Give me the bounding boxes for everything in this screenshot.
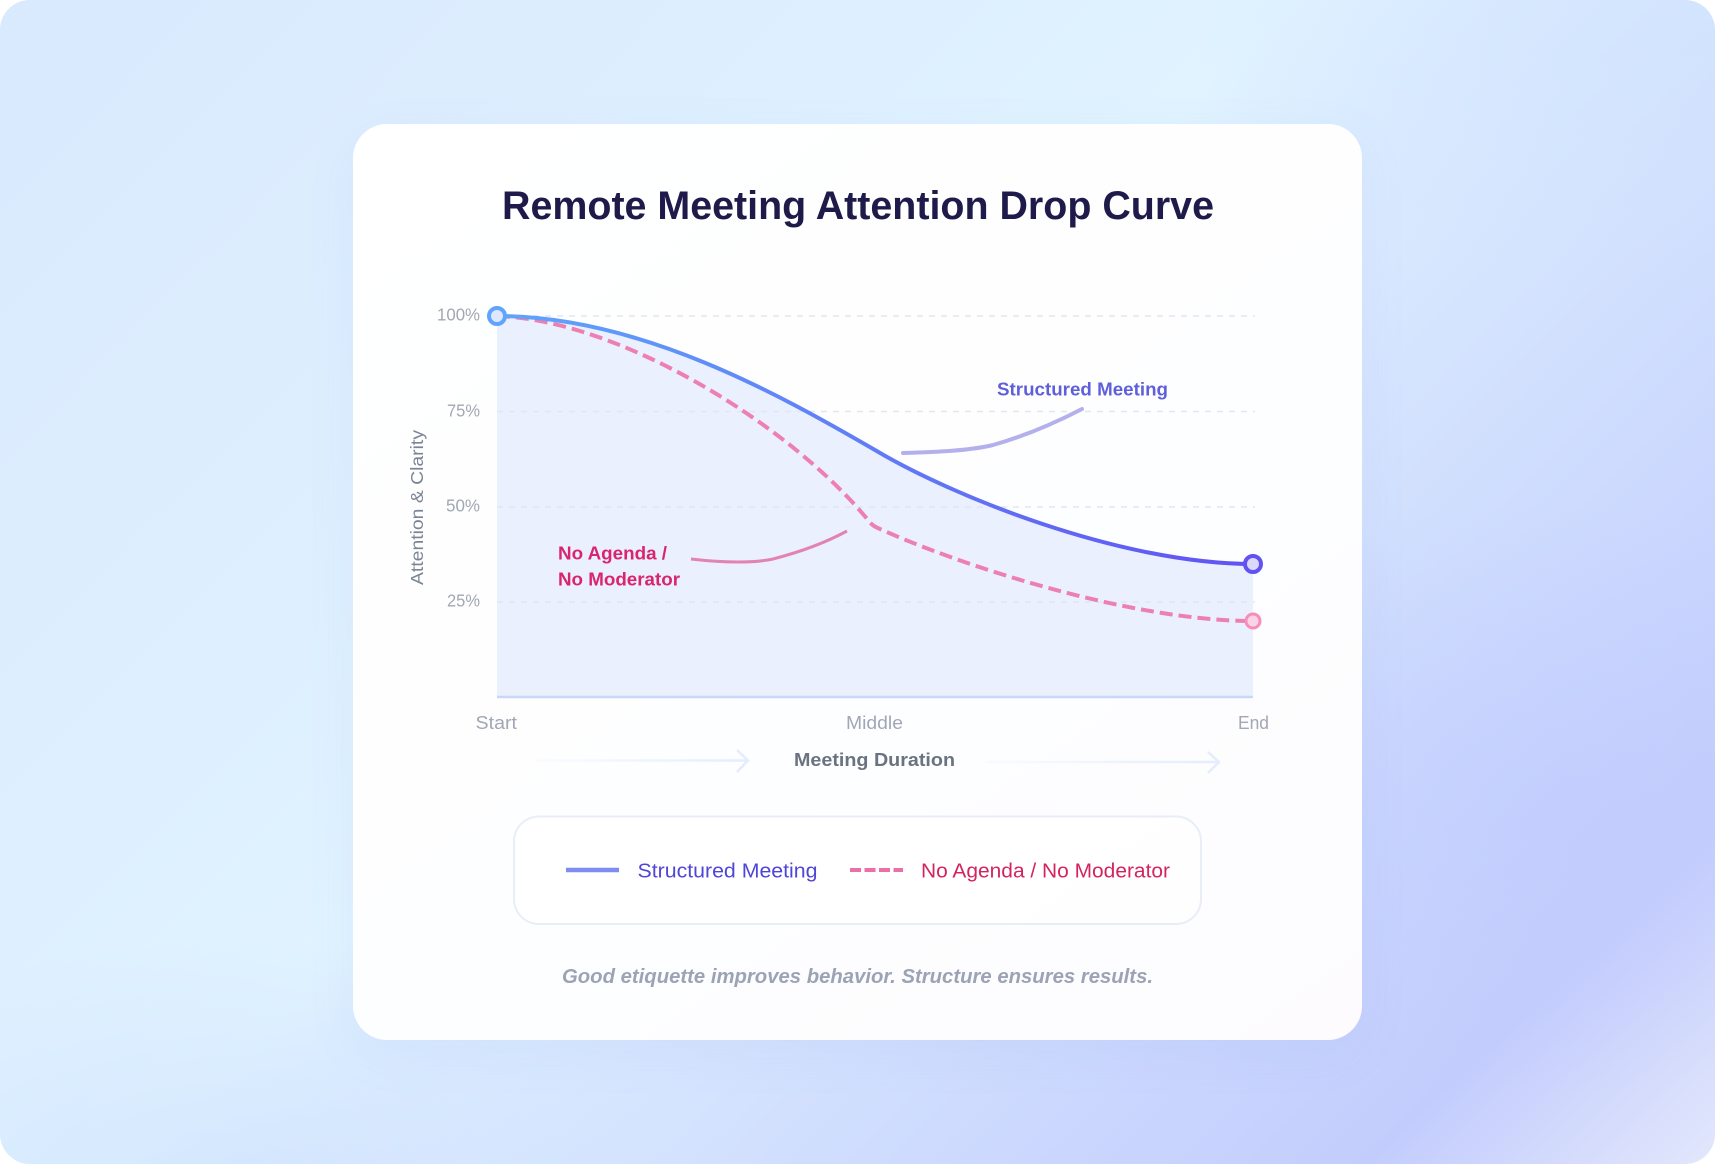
callout: no agenda [558, 531, 847, 590]
x axis line [497, 696, 1253, 698]
arrow: left duration [535, 750, 748, 772]
footer note: Good etiquette improves behavior. Structure ensures results. [562, 966, 1153, 988]
end marker: structured [1245, 556, 1261, 572]
callout: no agenda: No Moderator [558, 568, 680, 590]
grid lines [497, 316, 1255, 602]
area under structured curve [497, 316, 1253, 697]
y axis tick labels [437, 304, 480, 610]
start marker [489, 308, 505, 324]
callout: structured meeting [903, 378, 1168, 453]
callout: structured meeting: Structured Meeting [997, 378, 1168, 400]
x axis title: Meeting Duration [794, 749, 955, 770]
x axis labels [476, 713, 1269, 733]
x axis labels: Middle [846, 713, 903, 733]
blue solid curve: structured meeting [497, 316, 1253, 564]
end marker: no agenda [1246, 614, 1260, 628]
legend: structured meeting: Structured Meeting [638, 860, 818, 882]
legend: no agenda: No Agenda / No Moderator [921, 860, 1170, 882]
y axis tick labels: 50% [446, 496, 480, 516]
x axis labels: Start [476, 713, 517, 733]
callout: no agenda: No Agenda / [558, 542, 667, 564]
y axis title: Attention & Clarity [407, 430, 427, 585]
arrow: right duration [985, 752, 1219, 773]
title: Remote Meeting Attention Drop Curve [502, 184, 1214, 228]
y axis tick labels: 75% [447, 400, 480, 420]
pink dashed curve: no agenda [497, 316, 1253, 621]
y axis tick labels: 25% [447, 590, 480, 610]
x axis labels: End [1238, 713, 1269, 733]
legend panel [514, 816, 1201, 924]
panel: main card [353, 124, 1362, 1040]
y axis tick labels: 100% [437, 304, 480, 324]
